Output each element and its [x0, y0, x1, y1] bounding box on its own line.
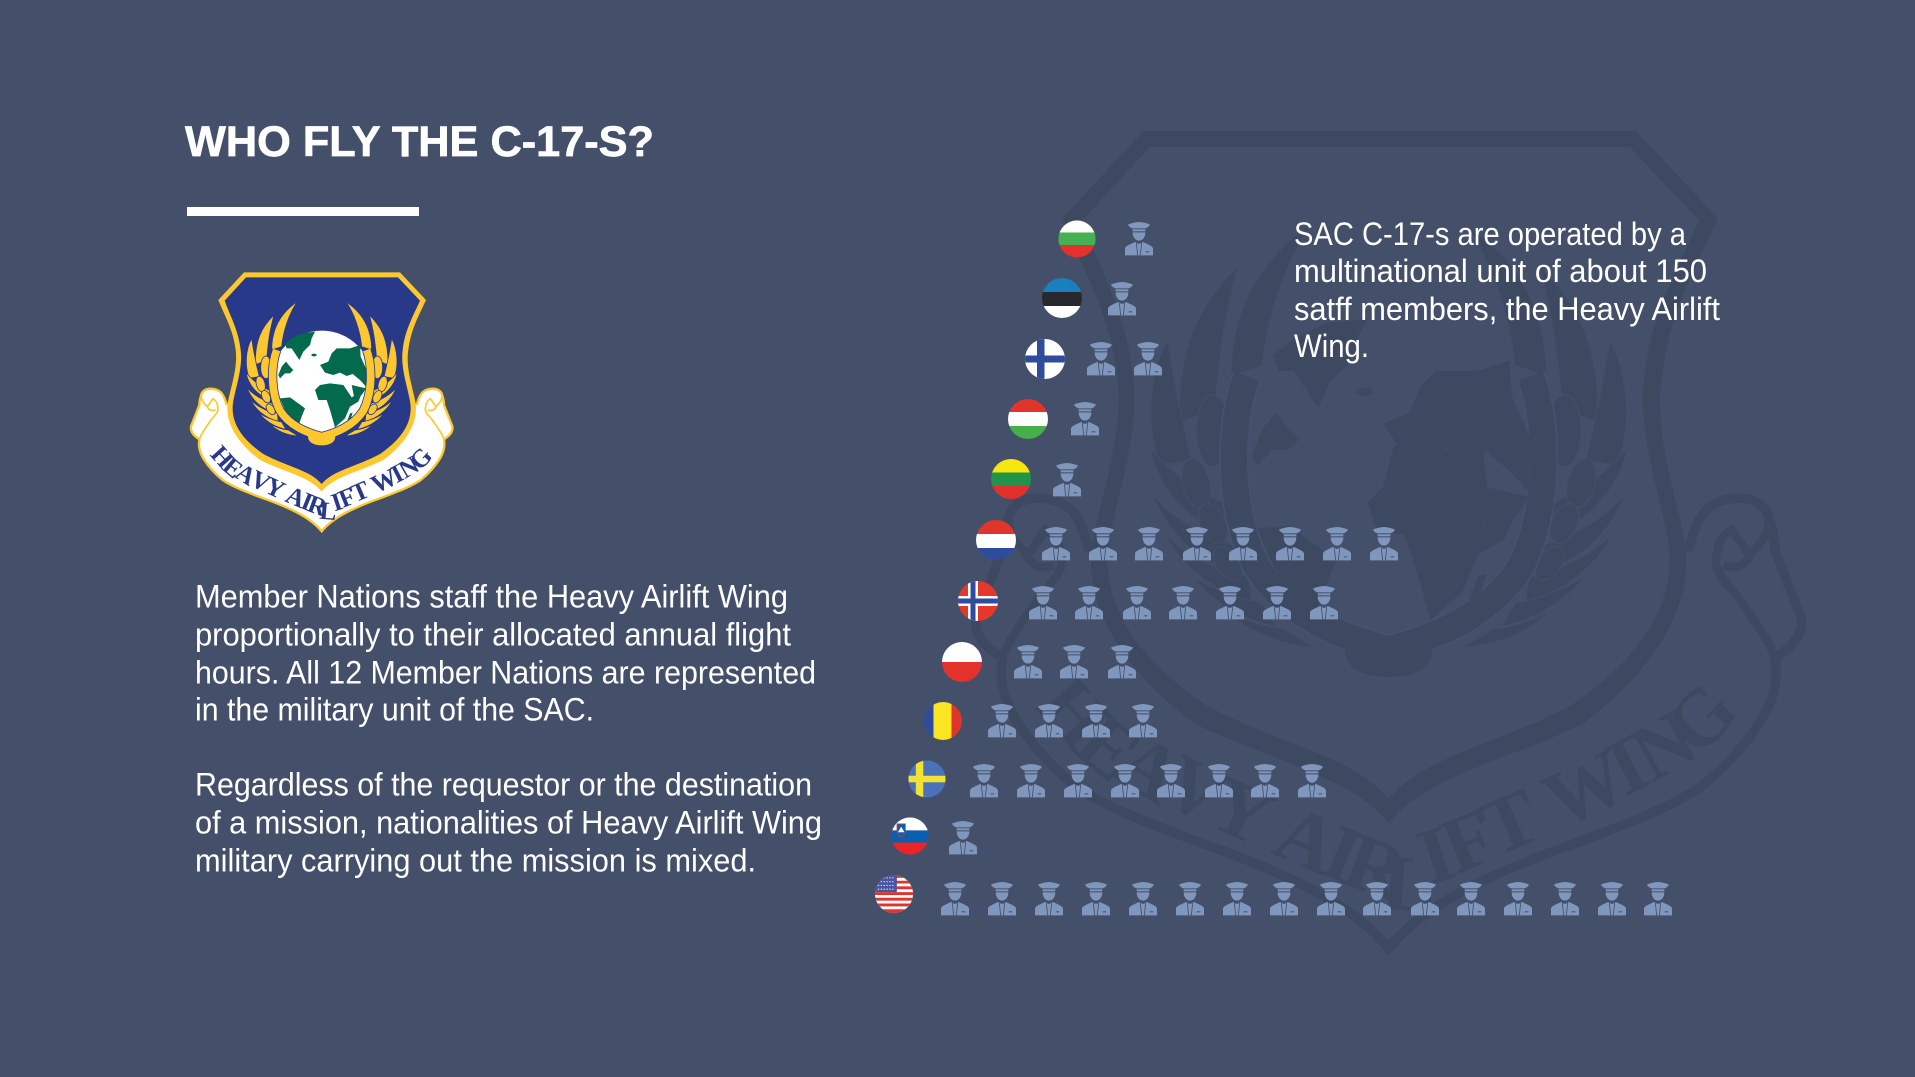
pilots: Netherlands	[1042, 527, 1398, 560]
pilots: United States	[941, 882, 1672, 915]
pilots: Norway	[1029, 586, 1338, 619]
row: Finland	[1025, 339, 1162, 379]
flag: Estonia	[1042, 278, 1082, 318]
row: Norway	[958, 581, 1338, 621]
row: Sweden	[908, 760, 1326, 798]
text block: member nations: military carrying out the mission is mixed.	[195, 842, 756, 878]
pilots: Lithuania	[1053, 463, 1081, 496]
text block: member nations	[195, 578, 822, 878]
flag: Poland	[942, 642, 982, 682]
pilots: Bulgaria	[1125, 222, 1153, 255]
flag: Finland	[1025, 339, 1065, 379]
pilots: Poland	[1014, 645, 1136, 678]
text block: member nations: Member Nations staff the Heavy Airlift Wing	[195, 578, 788, 614]
flag: United States	[875, 875, 913, 913]
text block: SAC operators	[1294, 216, 1720, 364]
staff pictogram chart by nation	[875, 220, 1672, 915]
row: Bulgaria	[1058, 220, 1153, 258]
row: Netherlands	[976, 520, 1398, 560]
flag: Lithuania	[991, 459, 1031, 499]
title: WHO FLY THE C-17-S?	[185, 118, 654, 166]
flag: Bulgaria	[1058, 220, 1096, 258]
text block: SAC operators: Wing.	[1294, 328, 1369, 364]
pilots: Slovenia	[949, 821, 977, 854]
text block: member nations: Regardless of the requestor or the destination	[195, 766, 812, 802]
pilots: Finland	[1087, 342, 1162, 375]
row: Estonia	[1042, 278, 1136, 318]
flag: Norway	[958, 581, 998, 621]
flag: Romania	[924, 702, 962, 740]
row: United States	[875, 875, 1672, 915]
flag: Hungary	[1008, 399, 1048, 439]
pilots: Sweden	[970, 764, 1326, 797]
pilots: Hungary	[1071, 402, 1099, 435]
row: Hungary	[1008, 399, 1099, 439]
text block: SAC operators: SAC C-17-s are operated by a	[1294, 216, 1687, 252]
row: Romania	[924, 702, 1157, 740]
text block: SAC operators: satff members, the Heavy Airlift	[1294, 291, 1720, 327]
text block: member nations: in the military unit of the SAC.	[195, 692, 594, 728]
pilots: Romania	[988, 704, 1157, 737]
flag: Sweden	[908, 760, 946, 798]
text block: member nations: hours. All 12 Member Nations are represented	[195, 654, 816, 690]
row: Lithuania	[991, 459, 1081, 499]
text block: member nations: of a mission, nationalities of Heavy Airlift Wing	[195, 804, 822, 840]
title underline	[187, 207, 419, 216]
row: Slovenia	[891, 817, 977, 855]
text block: member nations: proportionally to their allocated annual flight	[195, 616, 791, 652]
watermark: faded heavy airlift wing emblem: HEAVY AIRLIFT WING	[1021, 661, 1755, 931]
emblem: heavy airlift wing shield	[191, 272, 452, 531]
text block: SAC operators: multinational unit of about 150	[1294, 253, 1707, 289]
watermark: faded heavy airlift wing emblem	[976, 131, 1802, 948]
flag: Slovenia	[891, 817, 929, 855]
emblem: heavy airlift wing shield: HEAVY AIRLIFT WING	[205, 440, 438, 526]
flag: Netherlands	[976, 520, 1016, 560]
pilots: Estonia	[1108, 282, 1136, 315]
row: Poland	[942, 642, 1136, 682]
